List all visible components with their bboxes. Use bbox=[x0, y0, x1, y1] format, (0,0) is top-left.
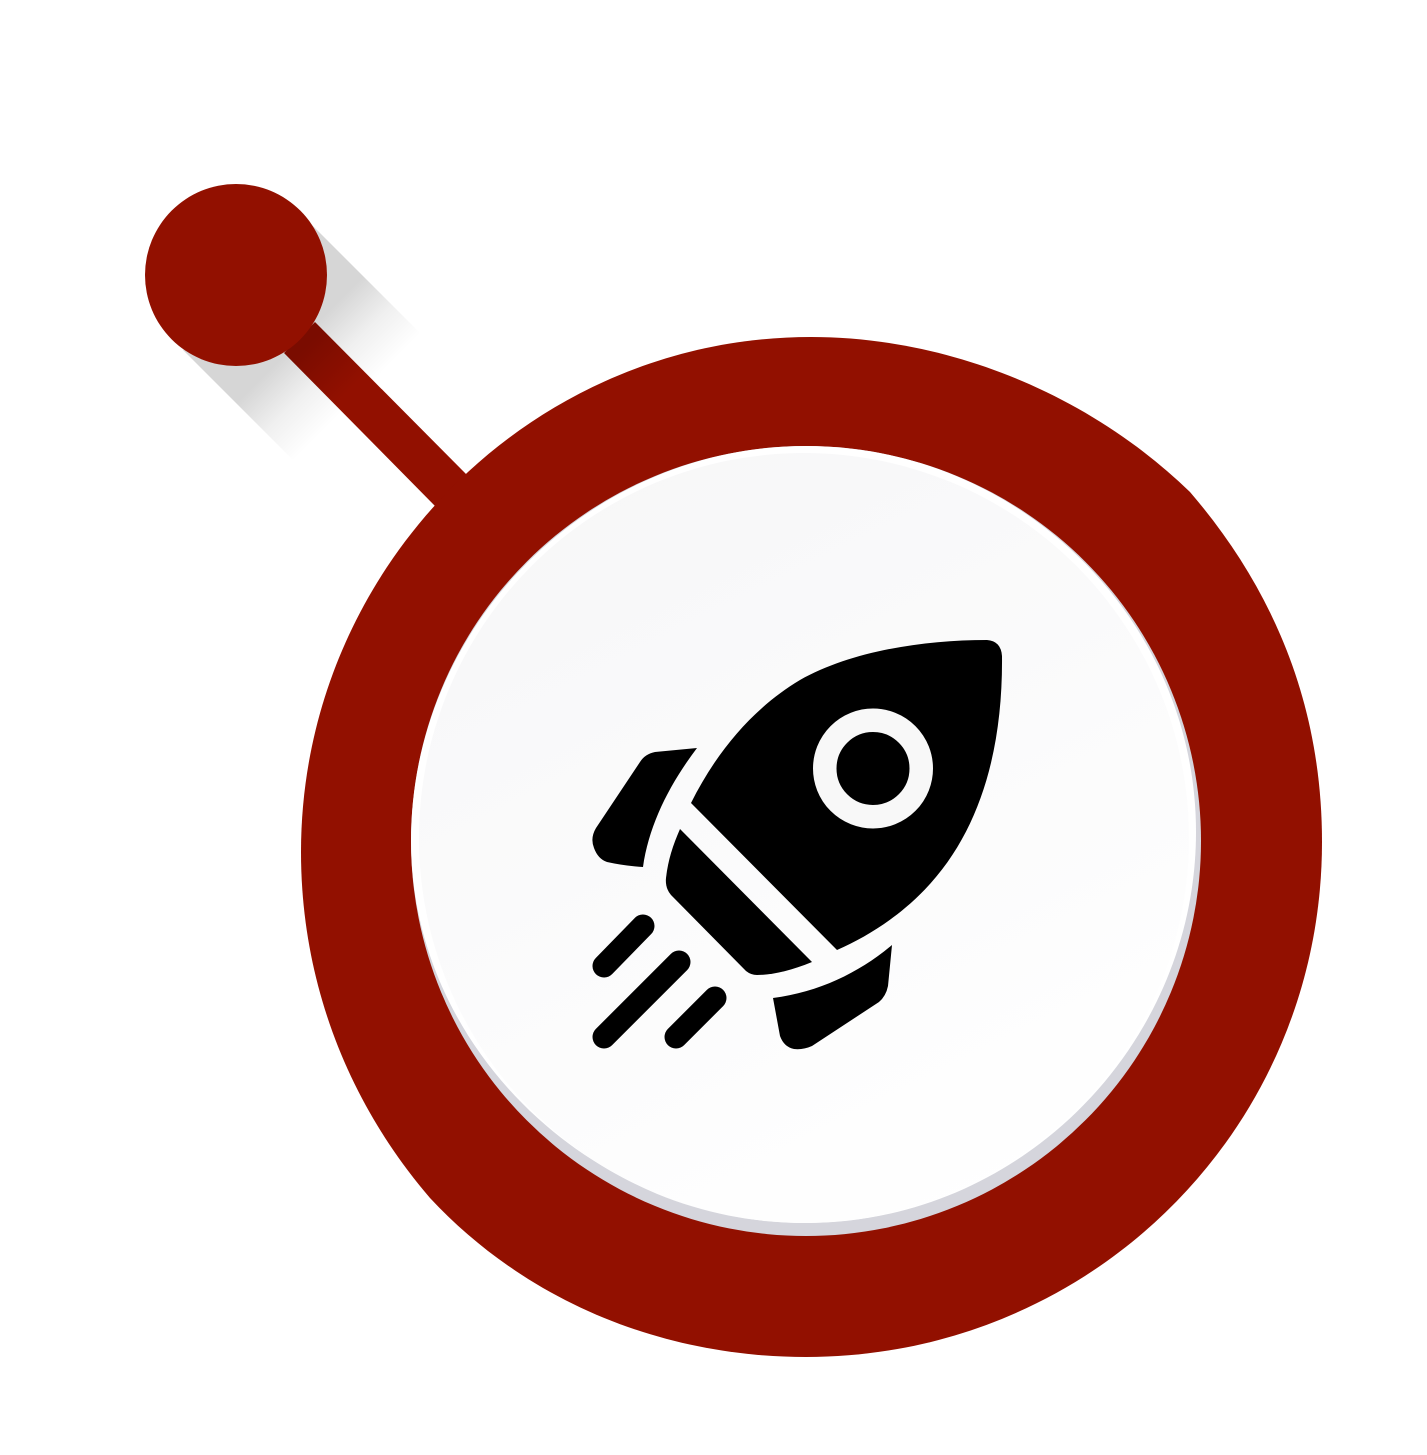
inner circle shadow edge bbox=[411, 446, 1201, 1236]
outer red ring bbox=[301, 337, 1322, 1357]
connector stem bbox=[284, 322, 467, 506]
left fin bbox=[592, 748, 697, 867]
rocket body bbox=[691, 640, 1002, 950]
connector dot bbox=[145, 184, 327, 366]
right fin bbox=[773, 945, 892, 1049]
exhaust lines bbox=[604, 926, 715, 1037]
rocket window bbox=[825, 720, 921, 817]
inner white circle bbox=[411, 446, 1196, 1223]
cast shadow of connector bbox=[183, 220, 440, 480]
rocket base bbox=[666, 829, 812, 975]
icon: rocket bbox=[592, 640, 1002, 1049]
